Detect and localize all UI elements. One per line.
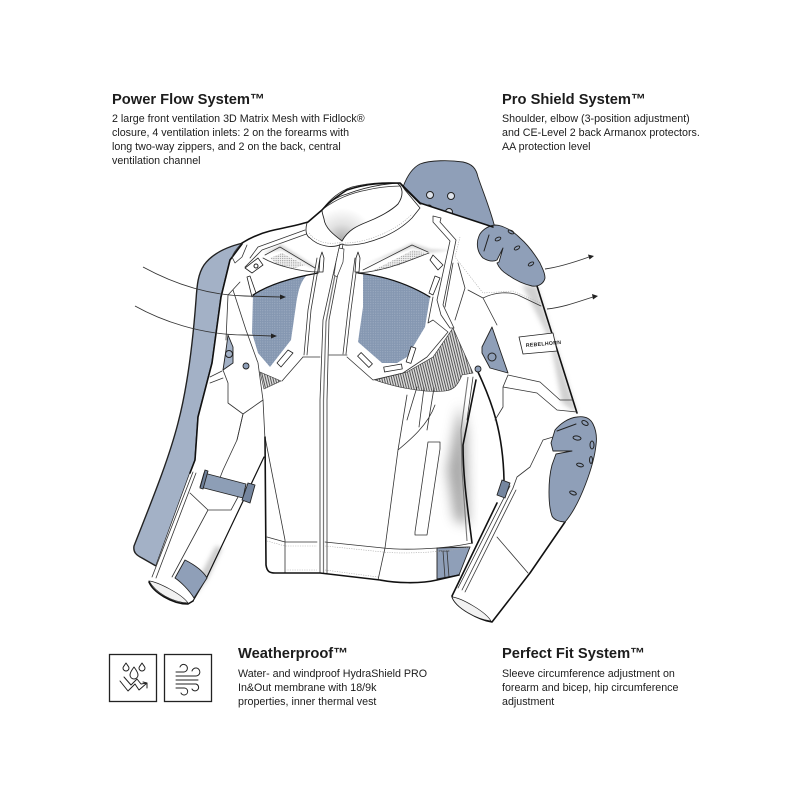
arm buckle [497, 480, 510, 498]
jacket illustration [134, 161, 596, 622]
torso [233, 190, 478, 583]
heading: Weatherproof: In&Out membrane with 18/9k [238, 682, 377, 694]
left back sleeve [134, 243, 243, 566]
icon: water and breathability [110, 654, 156, 702]
heading: Weatherproof: properties, inner thermal vest [238, 696, 376, 708]
heading: Weatherproof [238, 646, 427, 708]
upper vents [245, 243, 450, 297]
lower left panel [223, 335, 263, 414]
heading: Perfect Fit System [502, 646, 678, 708]
heading: Pro Shield System [502, 92, 700, 153]
arrows: left airflow [135, 267, 286, 338]
shoulder seams left [210, 230, 481, 440]
arm brand label: REBELHORN [526, 340, 562, 349]
heading: Weatherproof: Weatherproof™ [238, 646, 348, 662]
heading: Pro Shield System: Pro Shield System™ [502, 92, 646, 108]
back protector [403, 161, 495, 228]
heading: Perfect Fit System: adjustment [502, 696, 554, 708]
chest pocket [415, 442, 440, 535]
left mesh panel [252, 275, 307, 367]
heading: Power Flow System: 2 large front ventilation 3D Matrix Mesh with Fidlock® [112, 113, 365, 125]
left front sleeve [149, 243, 265, 604]
heading: Perfect Fit System: Perfect Fit System™ [502, 646, 645, 662]
small blue panel right [482, 327, 508, 373]
shoulder strap [433, 216, 456, 328]
heading: Power Flow System: Power Flow System™ [112, 92, 265, 108]
left hatched mesh [260, 372, 281, 389]
heading: Power Flow System: closure, 4 ventilation inlets: 2 on the forearms with [112, 127, 349, 139]
heading: Pro Shield System: AA protection level [502, 141, 591, 153]
torso shading [447, 405, 468, 525]
left small blue panel [223, 335, 233, 370]
heading: Perfect Fit System: forearm and bicep, hip circumference [502, 682, 678, 694]
right mesh panel [358, 273, 430, 363]
right arm [420, 203, 596, 622]
right hatched mesh [375, 328, 473, 392]
icon: wind [164, 654, 212, 702]
arm brand label [519, 333, 562, 354]
collar [306, 183, 420, 246]
heading: Pro Shield System: Shoulder, elbow (3-position adjustment) [502, 113, 690, 125]
heading: Perfect Fit System: Sleeve circumference adjustment on [502, 668, 675, 680]
jacket outline [242, 183, 493, 583]
right shoulder protector [477, 225, 545, 286]
heading: Pro Shield System: and CE-Level 2 back Armanox protectors. [502, 127, 700, 139]
cuff band [175, 560, 207, 598]
heading: Weatherproof: Water- and windproof HydraShield PRO [238, 668, 427, 680]
heading: Power Flow System: long two-way zippers, and 2 on the back, central [112, 141, 341, 153]
elbow protector [549, 417, 596, 522]
hip adjuster [437, 547, 470, 579]
sleeve strap [200, 470, 255, 503]
centre zipper and seams [265, 216, 473, 580]
arrows: right airflow [545, 254, 598, 309]
heading: Power Flow System [112, 92, 365, 167]
heading: Power Flow System: ventilation channel [112, 155, 201, 167]
